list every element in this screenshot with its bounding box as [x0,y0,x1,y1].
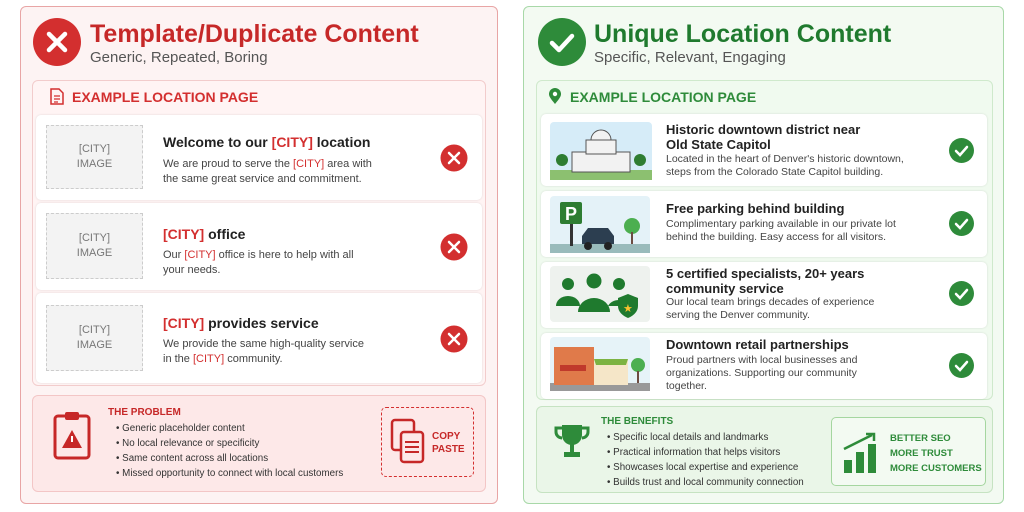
row 3 right: team: 5 certified specialists, 20+ years [666,266,864,281]
row 1 left [36,115,482,200]
row 1 left: We are proud to serve the [CITY] area with [163,158,372,170]
row 4 right: retail: together. [666,380,707,392]
title left: Template/Duplicate Content [90,20,419,48]
panel: template content [20,6,498,504]
panel: the problem: THE PROBLEM [108,407,181,418]
row 3 right: team: ★ [623,303,633,315]
row 2 left: Our [CITY] office is here to help with all [163,249,354,261]
header: example location page right: EXAMPLE LOCATION PAGE [570,89,756,105]
icon: clipboard warning [54,412,90,460]
row 2 left: [CITY] office [163,226,245,242]
row 3 right: team: serving the Denver community. [666,309,810,321]
row 3 left: IMAGE [77,339,112,351]
icon: red X [33,18,81,66]
panel: the problem: Generic placeholder content [122,423,245,434]
row 2 left: your needs. [163,264,220,276]
row 1 left: Welcome to our [CITY] location [163,134,370,150]
panel: the problem: Same content across all locations [122,453,268,464]
row 1 right: capitol [541,114,987,186]
row 3 left: We provide the same high-quality service [163,338,364,350]
subtitle left: Generic, Repeated, Boring [90,49,268,66]
callout: results: BETTER SEO [890,433,951,444]
panel: the benefits: Practical information that helps visitors [613,447,780,458]
panel: unique content [523,6,1004,504]
row 4 right: retail [541,333,987,399]
row 1 left: [CITY] [79,143,110,155]
panel: the benefits [536,406,993,493]
panel: the benefits: Builds trust and local community connection [613,477,804,488]
row 3 left [36,293,482,383]
row 3 right: team [541,262,987,328]
card: example page left [32,80,486,386]
icon: copy paste [381,407,474,477]
panel: the problem [32,395,486,492]
card: example page right [536,80,993,400]
row 2 left: IMAGE [77,247,112,259]
row 4 right: retail: organizations. Supporting our community [666,367,857,379]
row 3 left: in the [CITY] community. [163,353,283,365]
panel: the problem: Missed opportunity to connect with local customers [122,468,343,479]
callout: results: MORE TRUST [890,448,953,459]
row 1 right: capitol: Old State Capitol [666,137,771,152]
row 3 left: [CITY] [79,324,110,336]
header: example location page left: EXAMPLE LOCATION PAGE [72,89,258,105]
callout: results: MORE CUSTOMERS [890,463,982,474]
row 4 right: retail: Downtown retail partnerships [666,337,849,352]
row 2 right: parking: behind the building. Easy access for all visitors. [666,231,886,243]
row 2 right: parking: Free parking behind building [666,201,844,216]
row 1 left: IMAGE [77,158,112,170]
panel: the problem: No local relevance or specificity [122,438,259,449]
panel: the benefits: Specific local details and landmarks [613,432,768,443]
panel: the benefits: Showcases local expertise and experience [613,462,798,473]
title right: Unique Location Content [594,20,891,48]
row 2 right: parking: Complimentary parking available in our private lot [666,218,896,230]
row 2 left [36,203,482,290]
row 3 right: team: Our local team brings decades of experience [666,296,874,308]
icon: copy paste: PASTE [432,444,465,455]
subtitle right: Specific, Relevant, Engaging [594,49,786,66]
row 1 left: the same great service and commitment. [163,173,362,185]
row 2 right: parking [541,191,987,257]
panel: the benefits: THE BENEFITS [601,416,673,427]
row 1 right: capitol: Located in the heart of Denver's historic downtown, [666,153,904,165]
icon: trophy [554,425,590,457]
icon: copy paste: COPY [432,431,460,442]
row 3 left: [CITY] provides service [163,315,319,331]
row 4 right: retail: Proud partners with local businesses and [666,354,857,366]
row 1 right: capitol: Historic downtown district near [666,122,860,137]
callout: results [831,417,986,486]
row 1 right: capitol: steps from the Colorado State Capitol building. [666,166,883,178]
row 2 right: parking: P [565,204,577,224]
row 3 right: team: community service [666,281,784,296]
row 2 left: [CITY] [79,232,110,244]
icon: green check [538,18,586,66]
